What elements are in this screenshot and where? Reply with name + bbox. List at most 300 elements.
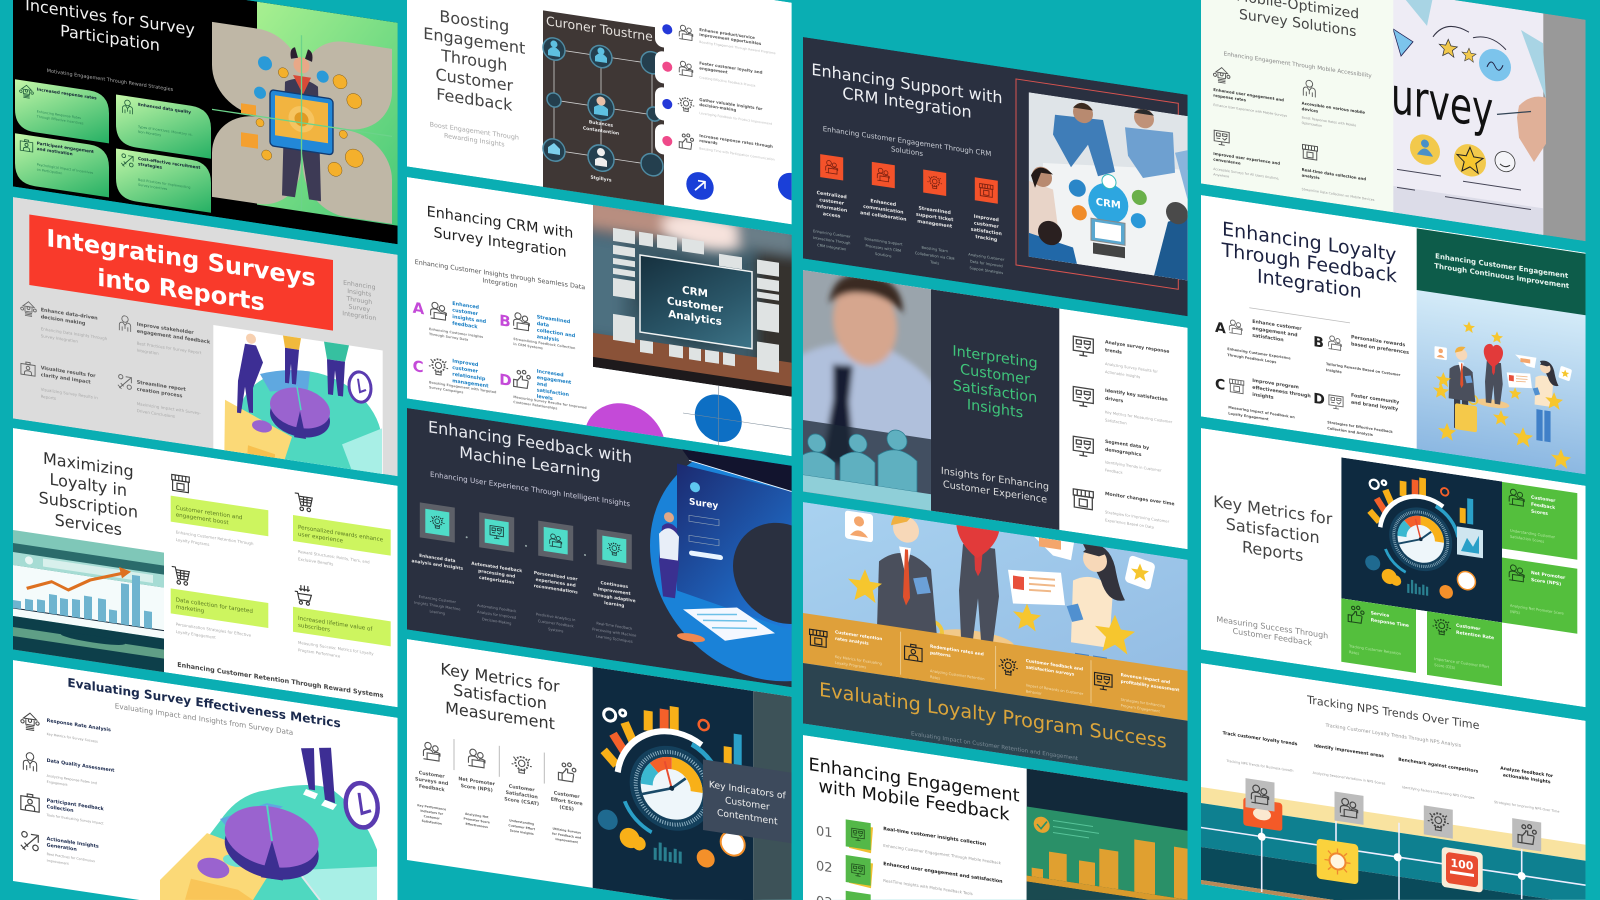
metric: customer satisfaction score: Satisfaction (506, 790, 538, 801)
item: centralized information: Centralized (817, 190, 847, 201)
card: enhanced data quality: Enhanced data quality (138, 102, 191, 115)
item D: levels (537, 394, 553, 402)
tile: customer retention rate: Importance of Customer Effort (1434, 657, 1490, 669)
item: actionable insights generation: Best Practices for Continuous (47, 852, 95, 863)
item: lifetime value: Increased lifetime value of (298, 616, 373, 633)
item: participant feedback collection (21, 793, 105, 826)
slide: Integrating Surveys into Reports (13, 197, 398, 476)
item: lifetime value (293, 585, 391, 658)
item C: Measuring Impact of Feedback on (1228, 405, 1295, 419)
item: product improvement: improvement opportunities (699, 32, 762, 46)
subtitle: Insights for Enhancing (941, 466, 1049, 493)
metric: retention rates (810, 626, 882, 672)
gray tile: benchmark (1424, 805, 1453, 839)
step: continuous improvement: improvement (598, 586, 631, 597)
item: product improvement (662, 24, 776, 54)
item: streamlined support: Boosting Team (922, 245, 948, 253)
item: accessible on mobile: Boost Response Rates with Mobile (1302, 115, 1356, 128)
item C: Survey Campaigns (429, 385, 463, 394)
header band: Enhancing Customer Engagement (1435, 251, 1569, 280)
item: centralized information: Interactions Through (813, 236, 850, 246)
tile: net promoter score (1502, 557, 1577, 634)
orange metrics band (803, 613, 1188, 721)
tile: customer feedback scores: Feedback (1531, 502, 1556, 511)
image: customer journey diagram: Contantantion (583, 125, 619, 137)
subtitle: Evaluating Impact and Insights from Survey Data (115, 701, 293, 737)
item: enhanced communication: Solutions (875, 252, 892, 258)
item: visualize results: Reports (41, 394, 56, 401)
gray tile: track loyalty (1246, 778, 1274, 812)
tile: customer feedback scores: Satisfaction Scores (1510, 535, 1544, 544)
item: real-time data: Streamline Data Collection on Mobile Devices (1302, 187, 1375, 202)
item: improve stakeholder engagement: Integration (137, 348, 159, 356)
item D (1313, 387, 1400, 441)
item: satisfaction tracking: Support Strategies (969, 266, 1003, 275)
item A: Through Survey Data (429, 332, 468, 342)
item: monitor changes: Strategies for Improving Customer (1105, 510, 1170, 524)
subtitle: Enhancing Customer Insights through Seamless Data (415, 258, 585, 291)
step: enhanced data analysis: analysis and insights (412, 558, 463, 572)
item C (413, 352, 497, 399)
card: participant engagement: Participant engagement (37, 141, 94, 154)
title: Subscription (39, 488, 138, 522)
item: improve stakeholder engagement: engagement and feedback (137, 329, 211, 346)
image: customer journey diagram: Curoner Toustrne (546, 13, 653, 44)
item: enhanced communication: Enhanced (870, 198, 896, 208)
tile: net promoter score: (NPS) (1510, 610, 1521, 615)
metric: customer surveys and feedback: Customer (424, 814, 440, 821)
title: Through Feedback (1221, 238, 1397, 287)
item C: C (413, 357, 424, 376)
item B: based on preferences (1351, 341, 1409, 356)
slide: Interpreting Customer Satisfaction Insights (793, 264, 1188, 550)
title: Engagement (423, 24, 525, 58)
title: Survey Solutions (1239, 7, 1356, 40)
metric: net promoter score: Score (NPS) (461, 783, 493, 794)
metric: feedback surveys (999, 654, 1084, 702)
card: participant engagement: on Participation (37, 168, 62, 175)
item B (1313, 329, 1409, 384)
title: Participation (60, 21, 160, 55)
step: automated feedback: Analysis for Improved (477, 610, 516, 620)
step: automated feedback (471, 511, 522, 627)
step: continuous improvement: Processing with Machine (592, 627, 637, 638)
item A: A (413, 299, 425, 318)
item A: customer (452, 307, 479, 317)
metric: customer effort score: Effort Score (551, 797, 583, 807)
item: improve stakeholder engagement: Improve stakeholder (137, 322, 194, 336)
item: customer retention boost: engagement boost (176, 512, 229, 526)
item D: and brand loyalty (1351, 400, 1399, 413)
step: enhanced data analysis: Learning (430, 609, 445, 616)
metric: net promoter score (458, 747, 496, 830)
card: enhanced data quality: Non-Monetary (138, 130, 161, 137)
item: improve stakeholder engagement (118, 315, 210, 355)
item: personalized rewards (293, 492, 391, 566)
step: personalized experiences: Personalized user (534, 570, 578, 583)
item: improve stakeholder engagement: Best Practices for Survey Report (137, 341, 202, 355)
item: gather insights: Leveraging Feedback for Product Improvement (699, 111, 773, 126)
image: CRM customer analytics (593, 205, 792, 397)
step: personalized experiences: Systems (548, 627, 563, 633)
card: increased response rates: Increased response rates (37, 87, 97, 101)
step: automated feedback: Automated feedback (471, 561, 522, 574)
image: gauge dashboard (1341, 458, 1502, 622)
slide: Key Metrics for Satisfaction Measurement (407, 639, 792, 900)
step: automated feedback: processing and (478, 568, 515, 580)
item: data quality assessment: Analyzing Response Rates and (47, 774, 97, 785)
item: improved experience: Accessible Surveys for All Users Anytime, (1213, 167, 1279, 181)
slide: Enhancing Feedback with Machine Learning (407, 392, 884, 701)
title: Enhancing Loyalty (1222, 217, 1396, 266)
item: response rate analysis: Key Metrics for Survey Success (47, 732, 98, 744)
tile: service response time: Service (1371, 610, 1389, 619)
item A (1215, 313, 1302, 368)
item: enhance data-driven decision making (20, 301, 107, 343)
chart image: laptop bar chart with arrow (13, 530, 164, 673)
white notched panel (655, 0, 793, 225)
title: Boosting (439, 7, 509, 36)
metric: customer surveys and feedback (415, 741, 449, 827)
item: improved experience: Anywhere (1213, 172, 1229, 179)
step 03 (816, 886, 871, 900)
column descriptions: Identifying Factors Influencing NPS Changes (1402, 785, 1475, 800)
item: analyze survey response trends: Actionable Insights (1105, 370, 1140, 379)
item D: Customer Relationships (513, 400, 557, 411)
side subtitle: Enhancing (343, 280, 376, 291)
title: Customer (960, 362, 1030, 388)
slide: Tracking NPS Trends Over Time (1201, 663, 1586, 900)
side subtitle: Through (345, 295, 372, 306)
title: into Reports (97, 264, 265, 317)
item: centralized information: customer (819, 197, 845, 207)
item: accessible on mobile: devices (1302, 106, 1319, 114)
column descriptions (1226, 758, 1559, 814)
tile: customer retention rate: Retention Rate (1456, 630, 1494, 641)
item A: Enhance customer (1252, 319, 1302, 332)
card: participant engagement: Psychological Impact of Incentives (37, 163, 93, 175)
metric: retention rates: Customer retention (835, 629, 882, 642)
item: response rate analysis (21, 712, 111, 746)
step: continuous improvement: Continuous (600, 580, 629, 590)
item D: Foster community (1351, 393, 1400, 406)
metric: retention rates: rates analysis (835, 636, 869, 647)
slide: Enhancing CRM with Survey Integration (407, 167, 807, 513)
item D: and (537, 381, 547, 389)
title: Key Metrics for (440, 659, 560, 696)
item: lifetime value: Program Performance (298, 647, 341, 659)
title: Feedback (436, 84, 513, 115)
item A: Enhanced (452, 301, 480, 311)
title: Machine Learning (459, 443, 601, 483)
metric: feedback surveys: Customer feedback and (1026, 658, 1083, 672)
item: monitor changes: Monitor changes over time (1105, 491, 1175, 507)
item: data collection: Personalization Strategies for Effective (176, 621, 252, 638)
item B: analysis (537, 334, 559, 343)
image: customer journey diagram: Bukances (589, 119, 613, 129)
metric: net promoter score: Promoter Score (464, 816, 490, 824)
item: centralized information: access (823, 212, 841, 220)
item: data quality assessment: Engagement (47, 780, 68, 787)
metric: customer surveys and feedback: Satisfaction (422, 819, 442, 826)
step 01: Enhancing Customer Engagement Through Mobile Feedback (883, 843, 1002, 865)
item A: feedback (452, 321, 478, 330)
item: accessible on mobile: Optimization (1302, 121, 1322, 128)
column headings: actionable insights (1503, 772, 1551, 785)
icon tile: orange badge (1243, 797, 1282, 831)
step: personalized experiences: experiences and (536, 577, 576, 589)
decor: magenta circle (584, 398, 666, 492)
column headings: Identify improvement areas (1314, 743, 1384, 759)
column headings: Track customer loyalty trends (1223, 730, 1298, 747)
subtitle: Enhancing Customer Engagement Through CRM (823, 124, 991, 158)
item: enhanced communication: Streamlining Support (864, 237, 903, 247)
band dividers (901, 632, 1091, 703)
item: streamline report creation: Streamline report (137, 380, 186, 393)
item: lifetime value: subscribers (298, 623, 330, 634)
title: Tracking NPS Trends Over Time (1306, 693, 1480, 732)
step: continuous improvement: Learning Techniques (596, 634, 633, 644)
item: enhance data-driven decision making: decision making (41, 314, 86, 327)
illustration background (803, 502, 1188, 781)
metric: customer surveys and feedback: Indicators for (420, 809, 444, 816)
item: data quality assessment (22, 752, 114, 786)
item B: Tailoring Rewards Based on Customer (1326, 362, 1401, 377)
title: Services (55, 510, 122, 539)
metric: redemption rates: Rates (930, 675, 940, 681)
card: cost-effective recruitment: Survey Incentives (138, 183, 168, 191)
illustration: business people with stars (845, 487, 1156, 735)
dark gauge image (593, 667, 792, 900)
slide: Maximizing Loyalty in Subscription Services (13, 428, 398, 708)
subtitle: Measuring Success Through (1216, 615, 1328, 640)
metric: feedback surveys: Behavior (1026, 689, 1042, 696)
card: cost-effective recruitment: Cost-effective recruitment (138, 156, 200, 170)
item: response rates: Boosting Time with Participation Communication (699, 146, 775, 162)
item: actionable insights generation (20, 830, 98, 865)
item: customer retention boost: Customer retention and (176, 505, 243, 521)
illustration: survey screen in blue circle: Surey (689, 497, 718, 512)
item: visualize results: Visualizing Survey Results in (41, 387, 98, 400)
item: identify satisfaction drivers: drivers (1105, 396, 1123, 404)
tile: customer feedback scores: Scores (1531, 509, 1548, 517)
item: enhanced engagement: Enhanced user engagement and (1213, 87, 1284, 102)
item: monitor changes: Experience Based on Data (1105, 518, 1154, 530)
item: monitor changes (1073, 486, 1175, 533)
item: improved experience: Improved user experience and (1213, 151, 1280, 166)
photo: team around CRM table (1028, 92, 1188, 280)
metric: revenue impact: Strategies for Enhancing (1121, 698, 1165, 708)
title: Survey Integration (433, 225, 567, 261)
item: satisfaction tracking: Analyzing Customer (968, 253, 1005, 262)
tile: net promoter score: Net Promoter (1531, 570, 1566, 581)
item B: data (537, 321, 549, 329)
item: accessible on mobile (1302, 79, 1365, 134)
metric: customer surveys and feedback: Customer (419, 770, 445, 780)
gray tile: analyze feedback (1512, 818, 1541, 852)
tile: customer retention rate (1427, 611, 1502, 686)
title: Interpreting (952, 343, 1038, 372)
card: increased response rates: Through Effective Incentives (36, 114, 84, 126)
item: response rates: Increase response rates through (699, 133, 773, 149)
step: personalized experiences: recommendations (534, 583, 578, 596)
metric: customer surveys and feedback: Surveys and (415, 776, 449, 787)
gray tile: improvement areas (1334, 792, 1364, 825)
tile: net promoter score: Score (NPS) (1531, 577, 1561, 588)
subtitle: Enhancing User Experience Through Intelligent Insights (430, 469, 630, 508)
item: streamlined support: Tools (929, 260, 939, 266)
item: satisfaction tracking: satisfaction (971, 227, 1002, 237)
item C: management (452, 378, 489, 390)
image: dark dashboard with bars (1027, 769, 1188, 900)
step 01: Real-time customer insights collection (883, 826, 987, 848)
title: Evaluating Loyalty Program Success (819, 678, 1167, 753)
photo: survey paper with stars (1368, 0, 1546, 236)
item C: relationship (452, 372, 486, 383)
title: Enhancing Feedback with (428, 417, 632, 467)
item: personalized rewards: user experience (298, 532, 344, 545)
tile: service response time (1341, 598, 1416, 673)
item B: Personalize rewards (1351, 334, 1405, 348)
item: actionable insights generation: Actionable Insights (47, 836, 99, 850)
image: customer journey diagram (543, 10, 664, 206)
item: participant feedback collection: Participant Feedback (47, 798, 105, 812)
title: Insights (967, 397, 1023, 422)
item: enhanced communication: and collaboration (860, 210, 906, 223)
item C: C (1215, 376, 1225, 394)
item: visualize results: clarity and impact (41, 372, 91, 386)
metric: customer effort score: Improvement (555, 837, 579, 844)
item: data collection: marketing (176, 604, 205, 615)
item: data quality assessment: Data Quality Assessment (47, 758, 115, 774)
title: Measurement (445, 698, 555, 733)
step: continuous improvement (592, 529, 637, 645)
callout: key indicators: Contentment (717, 808, 778, 828)
slide: Evaluating Loyalty Program Success (803, 480, 1188, 781)
metric: customer effort score: Customer (554, 790, 580, 800)
header band: Through Continuous Improvement (1434, 261, 1570, 290)
callout: key indicators: Customer (725, 795, 770, 813)
item: enhanced communication: communication (863, 204, 904, 216)
image: CRM customer analytics: CRM (682, 284, 708, 300)
item: personalized rewards: Reward Structures: Points, Tiers, and (298, 549, 370, 565)
item: enhanced engagement: Enhance User Experience with Mobile Surveys (1213, 103, 1287, 118)
item: actionable insights generation: Improvement (47, 859, 69, 866)
card: cost-effective recruitment (116, 148, 211, 213)
subtitle: Customer Experience (943, 479, 1047, 506)
tile: net promoter score: Analyzing Net Promoter Score (1510, 604, 1565, 616)
item: analyze survey response trends: Analyze survey response (1105, 339, 1169, 355)
item C: effectiveness through (1252, 385, 1311, 400)
step: automated feedback: Decision-Making (482, 617, 511, 626)
title: Integrating Surveys (46, 224, 316, 292)
metric: revenue impact: Program Engagement (1121, 704, 1160, 714)
slide: Boosting Engagement Through Customer Feedback (407, 0, 805, 227)
timeline background (1201, 787, 1586, 900)
card: increased response rates (15, 79, 109, 143)
item: identify satisfaction drivers: Key Metrics for Measuring Customer (1105, 410, 1173, 424)
metric: revenue impact: profitability assessment (1121, 679, 1179, 693)
item: data collection (171, 566, 268, 648)
left panel (1201, 0, 1393, 212)
title: Customer (435, 65, 514, 95)
item: response rate analysis: Response Rate Analysis (47, 718, 111, 733)
title: with Mobile Feedback (819, 776, 1010, 825)
item A: Enhancing Customer Insights (429, 327, 483, 339)
image: green backdrop (257, 2, 398, 226)
metric: customer satisfaction score: Customer (509, 784, 535, 794)
item: participant feedback collection: Collection (47, 804, 74, 814)
card: enhanced data quality (116, 94, 211, 159)
item D: D (499, 370, 512, 390)
item A: A (1215, 320, 1226, 337)
side subtitle: Survey (349, 303, 370, 314)
item: enhance data-driven decision making: Survey Integration (41, 333, 78, 344)
item: satisfaction tracking: customer (974, 220, 999, 230)
slide: Enhancing Support with CRM Integration (803, 37, 1189, 316)
item C: customer (452, 365, 479, 375)
item B: Streamlining Feedback Collection (513, 337, 576, 350)
slide: Key Metrics for Satisfaction Reports (1201, 428, 1586, 707)
item C: Boosting Engagement with Targeted (429, 380, 497, 394)
decor: blue crosshair circle (683, 380, 792, 457)
red title banner (29, 214, 333, 331)
item: data collection: Data collection for targeted (176, 597, 253, 615)
card: cost-effective recruitment: strategies (138, 161, 163, 170)
item D: engagement (537, 375, 572, 386)
item: lifetime value: Measuring Success: Metrics for Loyalty (298, 640, 374, 656)
item: customer loyalty: Creating Effective Feedback Process (699, 75, 756, 88)
column headings: Benchmark against competitors (1398, 757, 1479, 775)
image: CRM customer analytics: Analytics (668, 308, 722, 328)
title: Reports (1242, 537, 1303, 565)
item: streamline report creation: Maximizing Impact with Survey- (137, 401, 201, 416)
item: customer loyalty (662, 55, 763, 89)
item: segment by demographics (1073, 434, 1162, 481)
title: Integration (1257, 264, 1362, 303)
item: centralized information: CRM Integration (817, 243, 846, 252)
step: automated feedback: Automating Feedback (477, 604, 517, 614)
item: streamline report creation (118, 374, 201, 423)
item C: Improve program (1252, 378, 1299, 391)
item: enhanced communication: Processes with CRM (865, 244, 901, 253)
side subtitle: Insights (347, 288, 371, 298)
illustration: person with tablet and coins (212, 22, 392, 224)
metric: customer effort score: Utilizing Surveys (552, 827, 581, 835)
item: gather insights (662, 91, 773, 126)
tile: service response time: Rates (1349, 650, 1359, 656)
illustration: survey screen in blue circle (650, 428, 884, 698)
title: Satisfaction (953, 378, 1037, 407)
metric: customer satisfaction score: Score Insights (510, 828, 534, 836)
item: product improvement: Enhance product/service (699, 27, 755, 40)
item: personalized rewards: Personalized rewards enhance (298, 525, 384, 544)
step: enhanced data analysis: Enhanced data (419, 553, 456, 564)
step: enhanced data analysis (412, 501, 463, 618)
subtitle: Customer Feedback (1233, 627, 1312, 647)
tile: customer feedback scores: Customer (1531, 495, 1556, 504)
item: satisfaction tracking: tracking (975, 234, 997, 243)
tile: customer retention rate: Score (CES) (1434, 663, 1456, 670)
step 01 (816, 815, 1002, 873)
item: actionable insights generation: Generation (47, 842, 77, 853)
item A: Enhancing Customer Experience (1227, 347, 1291, 361)
metric: redemption rates: Redemption rates and (930, 644, 984, 658)
metric: redemption rates: patterns (930, 650, 951, 659)
metric: customer satisfaction score (504, 754, 539, 837)
column headings: Analyze feedback for (1500, 765, 1554, 779)
title: Satisfaction (453, 680, 547, 713)
